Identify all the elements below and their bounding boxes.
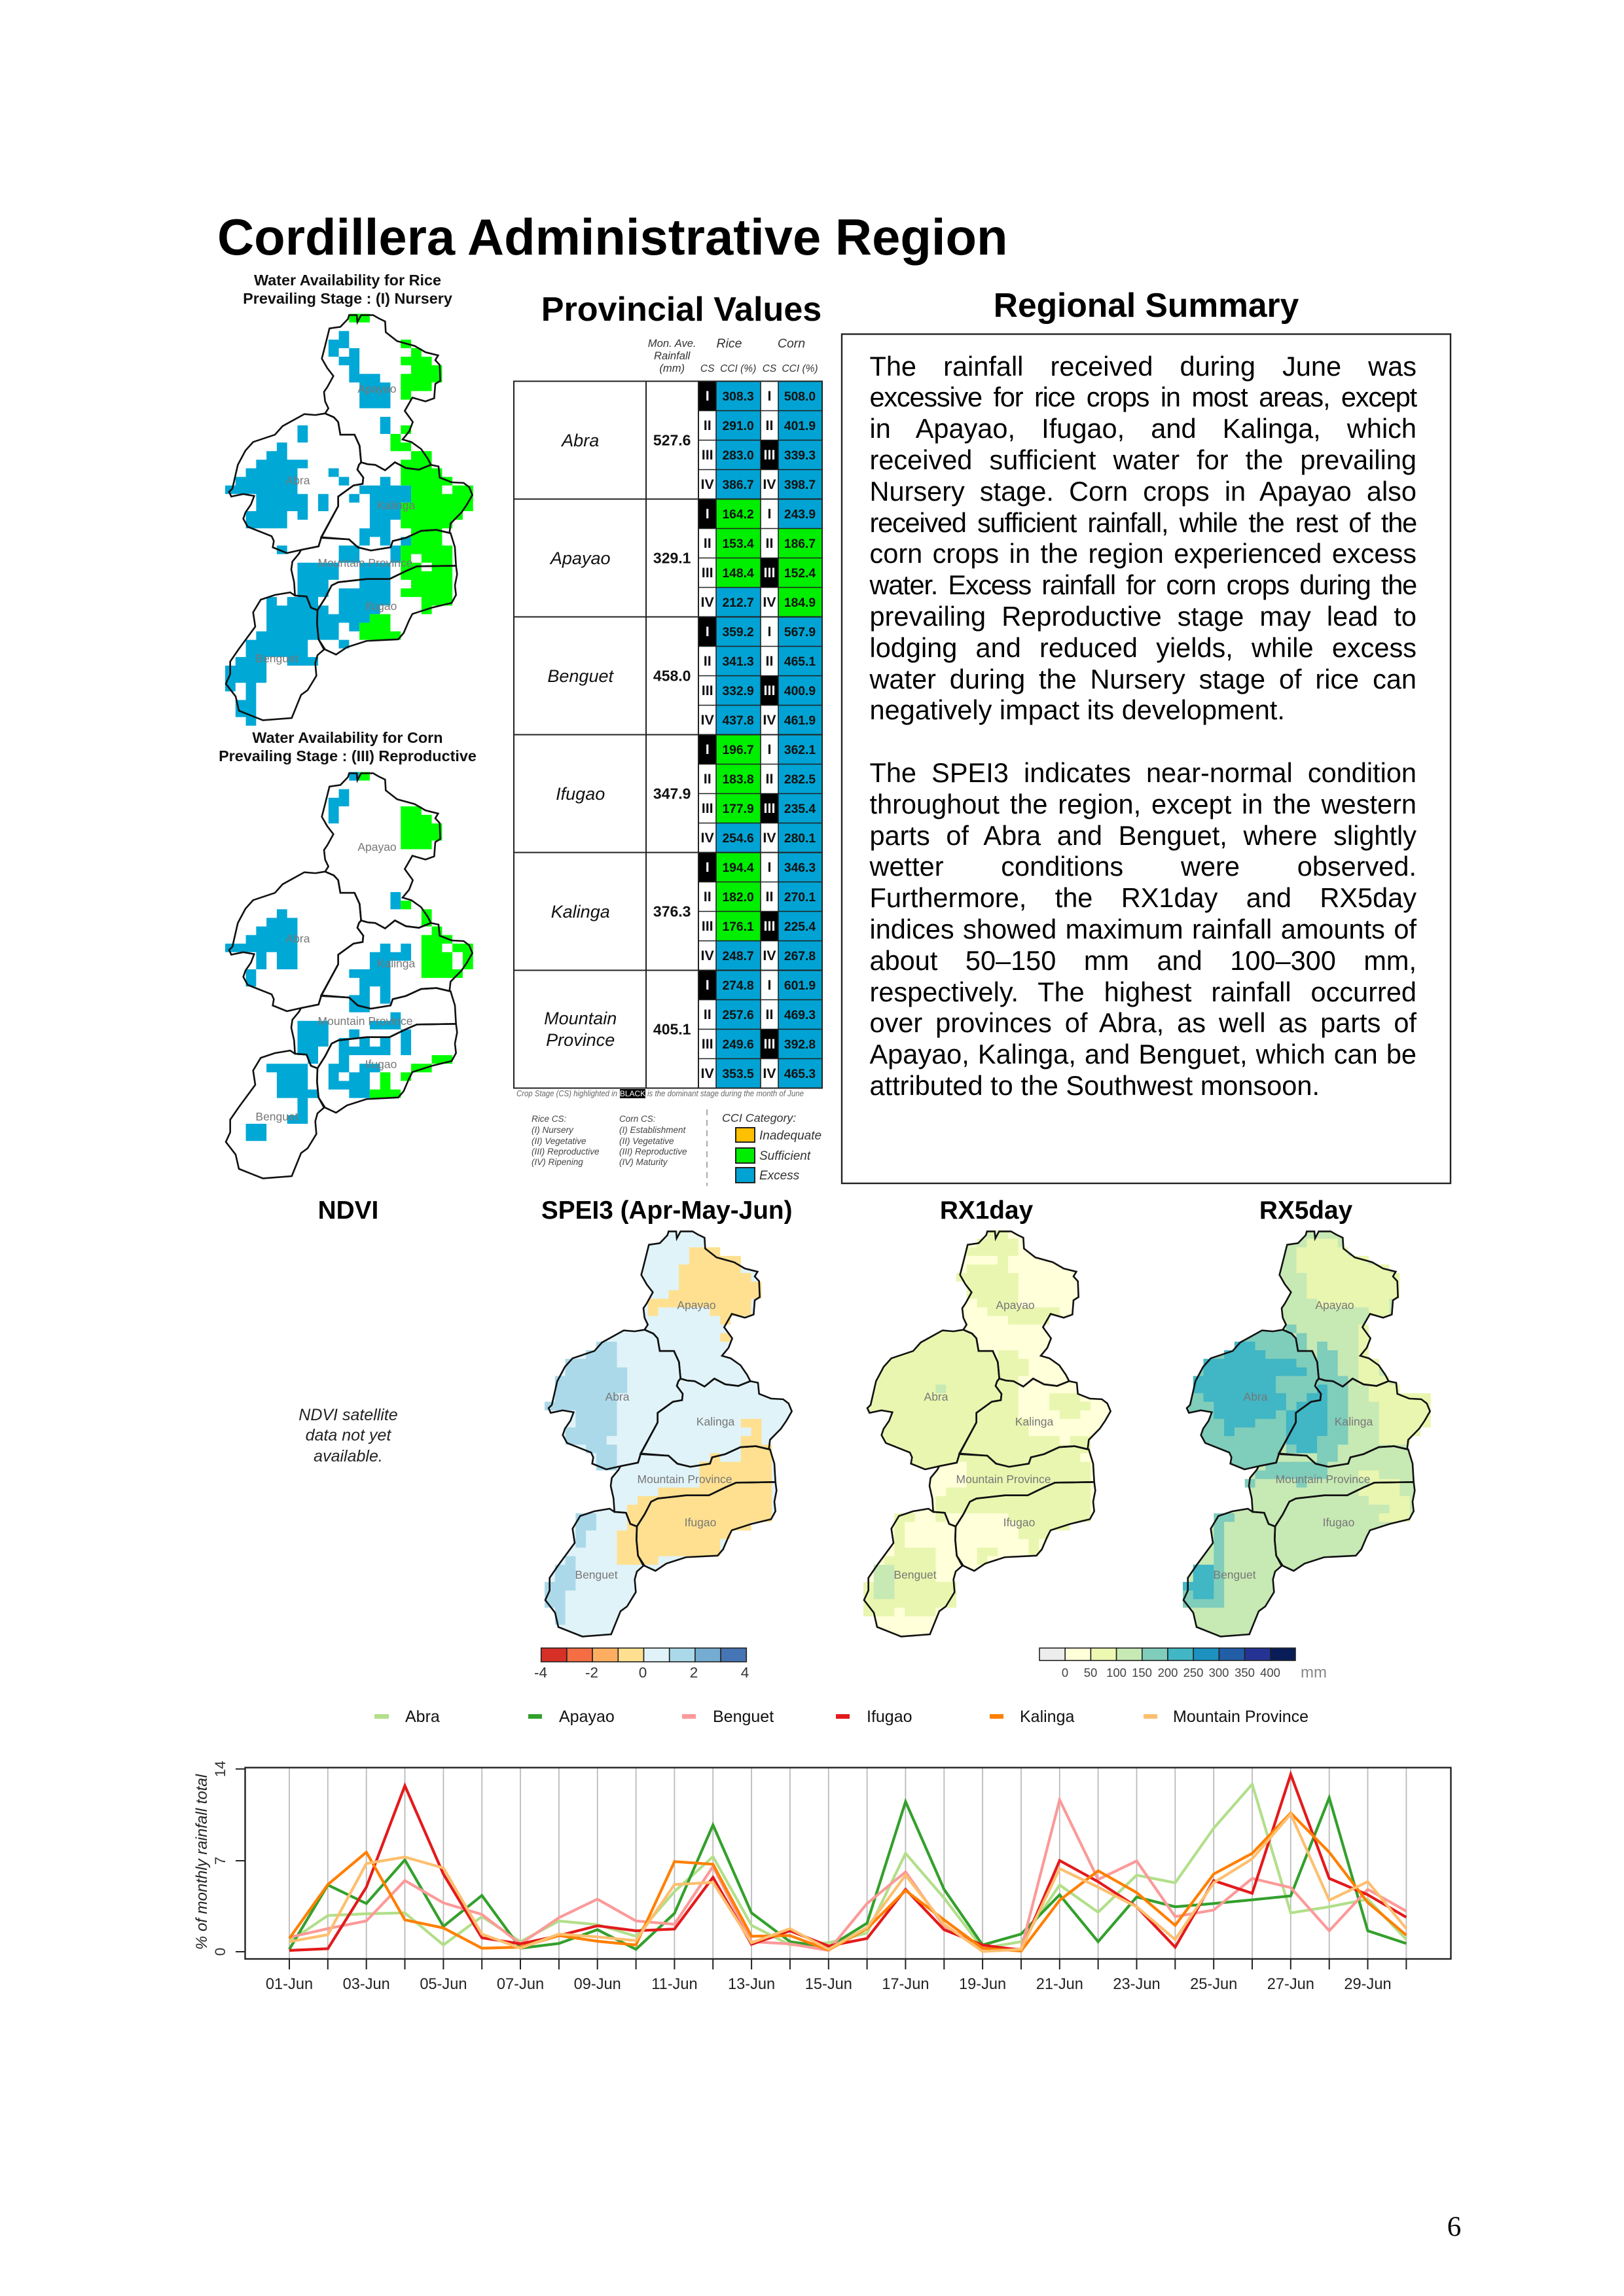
row group: Benguet: III bbox=[702, 683, 713, 698]
chart: daily rainfall percent: 19-Jun bbox=[959, 1976, 1006, 1993]
chart: daily rainfall percent: 03-Jun bbox=[343, 1976, 390, 1993]
row group: Abra: IV bbox=[763, 476, 776, 492]
row group: Benguet: IV bbox=[763, 712, 776, 728]
legend: SPEI color scale: -2 bbox=[585, 1664, 598, 1681]
table header: Corn bbox=[778, 336, 805, 351]
row group: Ifugao: 235.4 bbox=[784, 802, 816, 816]
row group: Mountain Province: 465.3 bbox=[784, 1067, 816, 1081]
chart: daily rainfall percent: 7 bbox=[212, 1857, 228, 1865]
row group: Kalinga: III bbox=[764, 918, 775, 934]
series: Mountain Province bbox=[289, 1814, 1406, 1952]
map: RX5day: Benguet bbox=[1213, 1568, 1256, 1581]
text block: regional summary: Furthermore, the RX1day and RX5day bbox=[869, 882, 1416, 913]
row group: Apayao: IV bbox=[701, 594, 715, 610]
row group: Benguet bbox=[547, 624, 816, 728]
row group: Abra: II bbox=[766, 418, 773, 433]
map: RX1day: Abra bbox=[924, 1390, 948, 1403]
legend: SPEI color scale: 0 bbox=[639, 1664, 647, 1681]
row group: Mountain Province: III bbox=[764, 1036, 775, 1052]
legend: SPEI color scale: 4 bbox=[741, 1664, 749, 1681]
text block: regional summary: respectively. The highest rainfall occurred bbox=[869, 977, 1416, 1007]
map: RX5day: Apayao bbox=[1315, 1299, 1354, 1312]
map: water availability for rice: Ifugao bbox=[365, 600, 397, 613]
legend: rainfall color scale: 200 bbox=[1158, 1666, 1178, 1679]
legend: CCI category: Sufficient bbox=[759, 1149, 811, 1163]
row group: Abra: I bbox=[706, 388, 710, 404]
heading: provincial values: Provincial Values bbox=[541, 291, 821, 329]
title: Cordillera Administrative Region bbox=[217, 209, 1008, 266]
map: water availability for corn: Mountain Province bbox=[318, 1014, 412, 1028]
row group: Kalinga: 248.7 bbox=[722, 950, 754, 963]
chart: daily rainfall percent: 09-Jun bbox=[574, 1976, 621, 1993]
chart: daily rainfall percent: 07-Jun bbox=[497, 1976, 544, 1993]
row group: Ifugao: 280.1 bbox=[784, 832, 816, 846]
panel: regional summary box bbox=[842, 334, 1451, 1183]
chart: daily rainfall percent: 29-Jun bbox=[1344, 1976, 1392, 1993]
row group: Mountain Province: Mountain bbox=[544, 1009, 617, 1028]
chart: daily rainfall percent: 27-Jun bbox=[1267, 1976, 1314, 1993]
chart: daily rainfall percent: 01-Jun bbox=[266, 1976, 313, 1993]
legend: SPEI color scale bbox=[534, 1648, 749, 1681]
page number: 6 bbox=[1447, 2212, 1461, 2242]
legend: rice crop stages: (IV) Ripening bbox=[532, 1157, 583, 1167]
table header bbox=[648, 336, 818, 374]
legend: provinces line chart: Apayao bbox=[559, 1708, 615, 1726]
row group: Abra: 308.3 bbox=[722, 390, 754, 404]
row group: Benguet: IV bbox=[701, 712, 715, 728]
text block: regional summary: wetter conditions were observed. bbox=[869, 851, 1416, 882]
chart: daily rainfall percent: 17-Jun bbox=[882, 1976, 929, 1993]
row group: Benguet: II bbox=[704, 653, 712, 669]
legend: corn crop stages: (IV) Maturity bbox=[619, 1157, 668, 1167]
legend: rainfall color scale: mm bbox=[1301, 1664, 1327, 1681]
legend: provinces line chart: Abra bbox=[405, 1708, 440, 1726]
map: RX5day: Mountain Province bbox=[1276, 1473, 1370, 1486]
heading: NDVI: NDVI bbox=[318, 1196, 378, 1225]
heading: water availability for corn bbox=[219, 729, 477, 764]
note: NDVI not available: data not yet bbox=[306, 1426, 391, 1444]
series: Apayao bbox=[289, 1798, 1406, 1949]
row group: Kalinga: IV bbox=[701, 948, 715, 963]
row group: Mountain Province: IV bbox=[763, 1066, 776, 1081]
row group: Apayao: I bbox=[768, 506, 771, 522]
row group: Abra bbox=[560, 388, 816, 492]
chart: daily rainfall percent: 21-Jun bbox=[1036, 1976, 1083, 1993]
legend: corn crop stages: (I) Establishment bbox=[619, 1125, 687, 1135]
legend: corn crop stages: (III) Reproductive bbox=[619, 1147, 687, 1157]
row group: Abra: III bbox=[764, 447, 775, 463]
legend: rainfall color scale: 50 bbox=[1084, 1666, 1097, 1679]
row group: Kalinga: 376.3 bbox=[653, 903, 691, 920]
map: SPEI3: Mountain Province bbox=[638, 1473, 732, 1486]
text block: regional summary bbox=[869, 351, 1417, 1101]
chart: daily rainfall percent: 13-Jun bbox=[728, 1976, 775, 1993]
note: NDVI not available: available. bbox=[314, 1447, 383, 1465]
row group: Apayao: 164.2 bbox=[722, 508, 754, 522]
map: water availability for corn bbox=[225, 772, 473, 1178]
legend: corn crop stages: (II) Vegetative bbox=[619, 1136, 674, 1146]
legend: rice crop stages: (III) Reproductive bbox=[532, 1147, 600, 1157]
row group: Abra: II bbox=[704, 418, 712, 433]
map: SPEI3: Benguet bbox=[575, 1568, 618, 1581]
heading: regional summary: Regional Summary bbox=[994, 286, 1299, 324]
row group: Mountain Province: I bbox=[768, 977, 771, 993]
row group: Mountain Province: 274.8 bbox=[722, 979, 754, 993]
heading: water availability for corn: Water Availability for Corn bbox=[252, 729, 443, 746]
row group: Abra: I bbox=[768, 388, 771, 404]
row group: Ifugao: 196.7 bbox=[722, 744, 754, 757]
map: RX1day bbox=[863, 1230, 1111, 1636]
text block: regional summary: about 50–150 mm and 100–300 mm, bbox=[869, 945, 1416, 976]
row group: Mountain Province: Province bbox=[546, 1030, 615, 1050]
text block: regional summary: throughout the region, except in the western bbox=[869, 789, 1416, 819]
row group: Abra: III bbox=[702, 447, 713, 463]
text block: regional summary: received sufficient water for the prevailing bbox=[869, 444, 1416, 475]
row group: Mountain Province: 392.8 bbox=[784, 1038, 816, 1052]
text block: regional summary: in Apayao, Ifugao, and Kalinga, which bbox=[869, 413, 1416, 444]
legend: rice crop stages bbox=[532, 1114, 600, 1167]
text block: regional summary: Apayao, Kalinga, and Benguet, which can be bbox=[869, 1039, 1416, 1069]
row group: Benguet: III bbox=[764, 683, 775, 698]
row group: Benguet: I bbox=[706, 624, 710, 639]
map: water availability for rice: Mountain Province bbox=[318, 556, 412, 569]
legend: rainfall color scale bbox=[1039, 1648, 1327, 1681]
table note: Crop Stage (CS) highlighted in bbox=[516, 1089, 617, 1098]
row group: Mountain Province: IV bbox=[701, 1066, 715, 1081]
map: RX1day: Mountain Province bbox=[956, 1473, 1051, 1486]
map: water availability for rice: Apayao bbox=[357, 382, 397, 395]
row group: Apayao bbox=[549, 506, 816, 610]
chart: daily rainfall percent: 11-Jun bbox=[651, 1976, 698, 1993]
map: RX1day: Ifugao bbox=[1003, 1516, 1035, 1529]
table note bbox=[516, 1089, 804, 1098]
row group: Ifugao: 183.8 bbox=[722, 773, 754, 787]
table header: Rainfall bbox=[654, 350, 691, 362]
row group: Ifugao: 177.9 bbox=[722, 802, 754, 816]
map: water availability for rice: Abra bbox=[286, 474, 310, 487]
row group: Mountain Province: 249.6 bbox=[722, 1038, 754, 1052]
text block: regional summary: The SPEI3 indicates near-normal condition bbox=[869, 757, 1416, 788]
table: provincial values bbox=[514, 381, 822, 1088]
row group: Apayao: 243.9 bbox=[784, 508, 816, 522]
chart: daily rainfall percent: 14 bbox=[212, 1761, 228, 1777]
map: SPEI3: Apayao bbox=[677, 1299, 716, 1312]
legend: corn crop stages bbox=[619, 1114, 687, 1167]
row group: Ifugao: Ifugao bbox=[556, 784, 605, 804]
heading: RX1day: RX1day bbox=[940, 1196, 1034, 1225]
row group: Ifugao: I bbox=[768, 742, 771, 757]
chart: daily rainfall percent: 0 bbox=[212, 1948, 228, 1956]
legend: provinces line chart bbox=[374, 1708, 1308, 1726]
row group: Kalinga: III bbox=[702, 918, 713, 934]
row group: Ifugao: 362.1 bbox=[784, 744, 816, 757]
row group: Benguet: I bbox=[768, 624, 771, 639]
text block: regional summary: attributed to the Southwest monsoon. bbox=[869, 1070, 1320, 1101]
row group: Mountain Province: I bbox=[706, 977, 710, 993]
table note: BLACK bbox=[620, 1089, 645, 1098]
row group: Apayao: 184.9 bbox=[784, 596, 816, 610]
legend: rice crop stages: Rice CS: bbox=[532, 1114, 567, 1124]
row group: Benguet: 567.9 bbox=[784, 626, 816, 639]
row group: Kalinga: 225.4 bbox=[784, 920, 816, 934]
row group: Benguet: 461.9 bbox=[784, 714, 816, 728]
row group: Mountain Province: 353.5 bbox=[722, 1067, 754, 1081]
legend: rainfall color scale: 350 bbox=[1235, 1666, 1255, 1679]
legend: rainfall color scale: 400 bbox=[1260, 1666, 1280, 1679]
row group: Benguet: Benguet bbox=[547, 666, 614, 686]
row group: Apayao: 212.7 bbox=[722, 596, 754, 610]
row group: Mountain Province bbox=[544, 977, 816, 1081]
row group: Kalinga: 176.1 bbox=[722, 920, 754, 934]
map: RX1day: Kalinga bbox=[1015, 1415, 1053, 1428]
text block: regional summary: excessive for rice crops in most areas, except bbox=[869, 382, 1416, 412]
row group: Ifugao: III bbox=[702, 800, 713, 816]
table header: CCI (%) bbox=[720, 363, 756, 374]
row group: Benguet: 400.9 bbox=[784, 685, 816, 698]
row group: Benguet: 332.9 bbox=[722, 685, 754, 698]
map: water availability for corn: Benguet bbox=[255, 1110, 298, 1123]
row group: Ifugao: 254.6 bbox=[722, 832, 754, 846]
series: Ifugao bbox=[289, 1774, 1406, 1950]
row group: Mountain Province: 469.3 bbox=[784, 1009, 816, 1022]
row group: Abra: 398.7 bbox=[784, 478, 816, 492]
text block: regional summary: parts of Abra and Benguet, where slightly bbox=[869, 820, 1416, 851]
map: RX5day: Abra bbox=[1244, 1390, 1268, 1403]
text block: regional summary: indices showed maximum rainfall amounts of bbox=[869, 914, 1416, 944]
row group: Ifugao: IV bbox=[701, 830, 715, 846]
map: RX5day: Kalinga bbox=[1335, 1415, 1373, 1428]
map: RX5day bbox=[1183, 1231, 1431, 1636]
legend: SPEI color scale: -4 bbox=[534, 1664, 547, 1681]
text block: regional summary: over provinces of Abra, as well as parts of bbox=[869, 1007, 1416, 1038]
row group: Kalinga: 270.1 bbox=[784, 891, 816, 905]
row group: Apayao: 148.4 bbox=[722, 567, 754, 581]
row group: Abra: Abra bbox=[560, 431, 599, 450]
heading: water availability for rice: Water Availability for Rice bbox=[254, 272, 441, 289]
row group: Ifugao: I bbox=[706, 742, 710, 757]
row group: Benguet: 359.2 bbox=[722, 626, 754, 639]
row group: Mountain Province: II bbox=[766, 1007, 773, 1022]
row group: Benguet: 458.0 bbox=[653, 668, 691, 685]
legend: provinces line chart: Mountain Province bbox=[1173, 1708, 1308, 1726]
chart: daily rainfall percent bbox=[193, 1761, 1451, 1993]
legend: rainfall color scale: 250 bbox=[1183, 1666, 1203, 1679]
row group: Abra: 283.0 bbox=[722, 449, 754, 463]
map: SPEI3 bbox=[545, 1231, 792, 1636]
row group: Mountain Province: II bbox=[704, 1007, 712, 1022]
row group: Benguet: 437.8 bbox=[722, 714, 754, 728]
legend: provinces line chart: Benguet bbox=[713, 1708, 774, 1726]
row group: Apayao: 186.7 bbox=[784, 537, 816, 551]
row group: Apayao: 153.4 bbox=[722, 537, 754, 551]
map: RX1day: Apayao bbox=[996, 1299, 1035, 1312]
row group: Benguet: II bbox=[766, 653, 773, 669]
legend: provinces line chart: Ifugao bbox=[867, 1708, 912, 1726]
table header: CCI (%) bbox=[782, 363, 818, 374]
row group: Kalinga: 346.3 bbox=[784, 861, 816, 875]
map: water availability for corn: Kalinga bbox=[377, 957, 415, 970]
legend: rainfall color scale: 100 bbox=[1106, 1666, 1127, 1679]
text block: regional summary: lodging and reduced yields, while excess bbox=[869, 632, 1416, 663]
row group: Kalinga: I bbox=[768, 859, 771, 875]
chart: daily rainfall percent: % of monthly rainfall total bbox=[193, 1774, 211, 1950]
map: water availability for corn: Abra bbox=[286, 932, 310, 945]
row group: Ifugao: IV bbox=[763, 830, 776, 846]
legend: CCI category: Excess bbox=[759, 1169, 800, 1183]
map: SPEI3: Ifugao bbox=[685, 1516, 716, 1529]
map: water availability for corn: Apayao bbox=[357, 840, 397, 853]
legend: rice crop stages: (II) Vegetative bbox=[532, 1136, 586, 1146]
series: Kalinga bbox=[289, 1813, 1406, 1951]
legend: rainfall color scale: 300 bbox=[1209, 1666, 1229, 1679]
heading: water availability for rice bbox=[243, 272, 452, 307]
row group: Kalinga: 194.4 bbox=[722, 861, 754, 875]
chart: daily rainfall percent: 25-Jun bbox=[1190, 1976, 1237, 1993]
row group: Apayao: Apayao bbox=[549, 548, 610, 568]
row group: Ifugao bbox=[556, 742, 816, 846]
row group: Benguet: 465.1 bbox=[784, 655, 816, 669]
text block: regional summary: Nursery stage. Corn crops in Apayao also bbox=[869, 476, 1416, 507]
text block: regional summary: water during the Nursery stage of rice can bbox=[869, 664, 1416, 694]
row group: Apayao: III bbox=[702, 565, 713, 581]
row group: Mountain Province: III bbox=[702, 1036, 713, 1052]
row group: Apayao: II bbox=[704, 535, 712, 551]
row group: Apayao: III bbox=[764, 565, 775, 581]
text block: regional summary: prevailing Reproductive stage may lead to bbox=[869, 601, 1416, 632]
legend: rice crop stages: (I) Nursery bbox=[532, 1125, 574, 1135]
row group: Kalinga: IV bbox=[763, 948, 776, 963]
map: RX5day: Ifugao bbox=[1323, 1516, 1354, 1529]
heading: water availability for corn: Prevailing Stage : (III) Reproductive bbox=[219, 747, 477, 764]
row group: Abra: 527.6 bbox=[653, 432, 691, 449]
note: NDVI not available bbox=[298, 1406, 398, 1465]
heading: SPEI3: SPEI3 (Apr-May-Jun) bbox=[541, 1196, 793, 1225]
map: RX1day: Benguet bbox=[893, 1568, 937, 1581]
legend: CCI category: Inadequate bbox=[759, 1129, 821, 1143]
row group: Apayao: II bbox=[766, 535, 773, 551]
row group: Kalinga: 267.8 bbox=[784, 950, 816, 963]
row group: Apayao: I bbox=[706, 506, 710, 522]
row group: Abra: 291.0 bbox=[722, 420, 754, 433]
row group: Kalinga: 182.0 bbox=[722, 891, 754, 905]
map: water availability for rice bbox=[225, 314, 473, 726]
table note: is the dominant stage during the month of June bbox=[647, 1089, 804, 1098]
row group: Apayao: 329.1 bbox=[653, 550, 691, 567]
row group: Benguet: 341.3 bbox=[722, 655, 754, 669]
text block: regional summary: corn crops in the region experienced excess bbox=[869, 538, 1416, 569]
row group: Ifugao: III bbox=[764, 800, 775, 816]
row group: Ifugao: 282.5 bbox=[784, 773, 816, 787]
row group: Kalinga: Kalinga bbox=[551, 902, 610, 922]
row group: Abra: 386.7 bbox=[722, 478, 754, 492]
map: water availability for rice: Kalinga bbox=[377, 499, 415, 512]
row group: Kalinga bbox=[551, 859, 816, 963]
row group: Abra: 508.0 bbox=[784, 390, 816, 404]
legend: rainfall color scale: 0 bbox=[1062, 1666, 1068, 1679]
series: Benguet bbox=[289, 1800, 1406, 1950]
row group: Apayao: IV bbox=[763, 594, 776, 610]
table header: Mon. Ave. bbox=[648, 337, 696, 350]
row group: Abra: 339.3 bbox=[784, 449, 816, 463]
row group: Abra: IV bbox=[701, 476, 715, 492]
text block: regional summary: The rainfall received during June was bbox=[869, 351, 1416, 382]
chart: daily rainfall percent: 23-Jun bbox=[1113, 1976, 1161, 1993]
row group: Apayao: 152.4 bbox=[784, 567, 816, 581]
row group: Mountain Province: 405.1 bbox=[653, 1021, 691, 1038]
map: SPEI3: Kalinga bbox=[696, 1415, 734, 1428]
row group: Abra: 401.9 bbox=[784, 420, 816, 433]
table header: (mm) bbox=[659, 362, 685, 374]
legend: rainfall color scale: 150 bbox=[1132, 1666, 1152, 1679]
row group: Ifugao: II bbox=[704, 771, 712, 787]
legend: CCI category bbox=[722, 1111, 821, 1183]
table header: CS bbox=[700, 363, 715, 374]
row group: Ifugao: II bbox=[766, 771, 773, 787]
legend: SPEI color scale: 2 bbox=[690, 1664, 698, 1681]
row group: Mountain Province: 601.9 bbox=[784, 979, 816, 993]
note: NDVI not available: NDVI satellite bbox=[298, 1406, 398, 1424]
text block: regional summary: water. Excess rainfall for corn crops during the bbox=[869, 569, 1416, 600]
table header: Rice bbox=[716, 336, 742, 351]
row group: Kalinga: II bbox=[704, 889, 712, 905]
chart: daily rainfall percent: 15-Jun bbox=[805, 1976, 852, 1993]
map: water availability for rice: Benguet bbox=[255, 652, 298, 665]
row group: Ifugao: 347.9 bbox=[653, 785, 691, 802]
series: Abra bbox=[289, 1784, 1406, 1948]
text block: regional summary: negatively impact its development. bbox=[869, 694, 1285, 725]
legend: provinces line chart: Kalinga bbox=[1020, 1708, 1074, 1726]
row group: Kalinga: I bbox=[706, 859, 710, 875]
row group: Mountain Province: 257.6 bbox=[722, 1009, 754, 1022]
table header: CS bbox=[763, 363, 777, 374]
text block: regional summary: received sufficient rainfall, while the rest of the bbox=[869, 507, 1416, 538]
row group: Kalinga: II bbox=[766, 889, 773, 905]
heading: RX5day: RX5day bbox=[1259, 1196, 1353, 1225]
heading: water availability for rice: Prevailing Stage : (I) Nursery bbox=[243, 290, 452, 307]
chart: daily rainfall percent: 05-Jun bbox=[420, 1976, 467, 1993]
map: SPEI3: Abra bbox=[605, 1390, 630, 1403]
legend: CCI category: CCI Category: bbox=[722, 1111, 796, 1124]
legend: corn crop stages: Corn CS: bbox=[619, 1114, 656, 1124]
map: water availability for corn: Ifugao bbox=[365, 1058, 397, 1071]
